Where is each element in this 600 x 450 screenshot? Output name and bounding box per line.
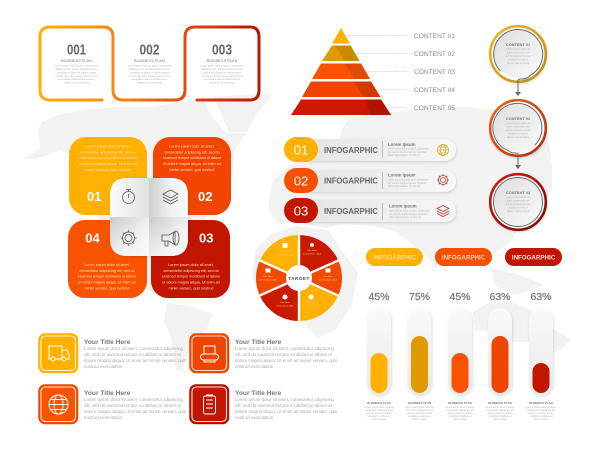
quadrant 02: minim veniam, quis nostrud (170, 168, 214, 172)
bar 45% second: 45% (449, 291, 471, 303)
step 003 text: 003 (212, 42, 232, 58)
bar 63%: dolore magna (493, 418, 508, 421)
circle content 01: Lorem ipsum dolor sit (506, 48, 530, 51)
feature: truck: dolore magna aliqua. Ut enim ad minim veniam, quis (84, 358, 187, 363)
feature: globe: Your Title Here (84, 390, 131, 397)
header pills (366, 248, 562, 266)
pill row 01: Lorem Ipsum (388, 142, 416, 147)
bar 63% second: incididunt ut labore et (529, 415, 553, 418)
bar 63% second: BUSINESS PLAN (529, 401, 553, 405)
bar 75% (405, 291, 435, 421)
feature: printer: nostrud exercitation. (235, 364, 275, 369)
circle content 01: dolore magna aliqua (507, 62, 530, 65)
circle content 02: sed do eiusmod tempor (505, 129, 531, 132)
step 003 text: ut enim ad minim veniam, quis nostrud (201, 75, 244, 78)
feature: clipboard: dolore magna aliqua. Ut enim ad minim veniam, quis (235, 409, 338, 414)
pyramid labels: CONTENT 03 (414, 69, 455, 76)
step 003 text: incididunt ut labore et dolore magna (203, 71, 242, 74)
pill row 03: dolor magna aliqua. Ut enim ad (389, 216, 422, 219)
step 002 text: incididunt ut labore et dolore magna (130, 71, 170, 74)
step 003 text (200, 42, 244, 85)
icon: gear (120, 230, 136, 246)
feature: printer: elit, sed do eiusmod tempor incididunt ut labore et (235, 352, 333, 357)
quadrant 01: minim veniam, quis nostrud (86, 168, 130, 172)
icon: clipboard (204, 395, 216, 414)
pill row 01: elit, sed do eiusmod tempor incididunt (388, 151, 427, 154)
header pills: INFOGARPHIC (373, 254, 417, 262)
step 003 text: Lorem ipsum dolor sit amet, consectetur (200, 64, 244, 68)
pyramid labels: CONTENT 04 (414, 87, 455, 94)
step 002 text: 002 (140, 42, 160, 58)
step 003 text: BUSINESS PLAN (207, 58, 238, 63)
feature: clipboard: nostrud exercitation. (235, 415, 275, 420)
quadrant 03: Lorem ipsum dolor sit amet, (168, 263, 214, 267)
bar 45% second: incididunt ut labore et (448, 415, 472, 418)
bar 63% second: Lorem ipsum dolor sit amet (526, 406, 556, 409)
circle content 03 (489, 173, 547, 231)
bar 75%: dolore magna (412, 418, 428, 421)
pill row 03: elit, sed do eiusmod tempor incididunt (389, 213, 428, 216)
icon: gear (437, 174, 449, 186)
step 002 text: Lorem ipsum dolor sit amet, consectetur (128, 64, 171, 68)
pyramid chart (291, 28, 455, 115)
icon: layers (163, 190, 178, 204)
bar 75%: consectetur adipiscing elit (406, 409, 434, 412)
feature: clipboard: Your Title Here (235, 390, 282, 397)
step 001 text: incididunt ut labore et dolore magna (57, 71, 97, 74)
circle content 02 (489, 99, 547, 169)
header pills: INFOGARPHIC (442, 254, 486, 262)
quadrant 01: eiusmod tempor incididunt ut labore (79, 156, 137, 160)
target pie chart: Lorem ipsum dolor (302, 304, 320, 308)
bar 45% second: BUSINESS PLAN (448, 401, 472, 405)
bar 45%: 45% (368, 291, 390, 303)
feature: truck (39, 334, 187, 372)
bar 45%: Lorem ipsum dolor sit amet (364, 406, 394, 409)
quadrant 01 (69, 137, 147, 215)
quadrant 04: 04 (85, 231, 101, 246)
circle content 03: dolore magna aliqua (507, 210, 530, 213)
circle content 01: incididunt ut labore (508, 58, 529, 62)
bar 63%: 63% (489, 291, 511, 303)
numbered pills (284, 137, 456, 223)
circle content 03: amet consectetur elit (507, 200, 530, 202)
circle content 01: amet consectetur elit (507, 52, 530, 54)
quadrant 03 (151, 220, 230, 298)
pill row 03 (284, 198, 456, 223)
bar 45%: incididunt ut labore et (367, 415, 391, 418)
pyramid labels (414, 33, 455, 112)
pill row 03: Lorem Ipsum (389, 204, 417, 208)
quadrant 03: minim veniam, quis nostrud (169, 286, 213, 290)
bar 45% second: Lorem ipsum dolor sit amet (445, 406, 475, 409)
bar 63% second: sed do eiusmod tempor (528, 412, 554, 415)
bar 45% second: sed do eiusmod tempor (447, 412, 473, 415)
pill row 01: dolor magna aliqua. Ut enim ad (388, 154, 421, 157)
center grey tile (110, 178, 188, 256)
icon: megaphone (162, 231, 179, 246)
pill row 03: INFOGARPHIC (324, 207, 378, 216)
bar 63% second (526, 291, 556, 421)
icon: layers (437, 206, 449, 216)
pill row 02: Lorem Ipsum (388, 172, 416, 178)
pill row 01 (284, 137, 456, 162)
feature: printer (190, 334, 338, 372)
step 001 text: exercitation ullamco laboris nisi ut (58, 78, 95, 81)
bar 63%: sed do eiusmod tempor (487, 412, 513, 415)
icon: truck (49, 346, 69, 361)
feature: truck: elit, sed do eiusmod tempor incididunt ut labore et (84, 352, 182, 357)
pill row 01: Lorem ipsum dolor sit amet, consectetur (388, 148, 429, 150)
quadrant 01: 01 (87, 189, 101, 204)
pyramid labels: CONTENT 01 (414, 33, 455, 40)
feature: globe: dolore magna aliqua. Ut enim ad minim veniam, quis (84, 409, 187, 414)
pyramid labels: CONTENT 05 (414, 105, 455, 112)
bar 63% second: consectetur adipiscing elit (527, 409, 555, 412)
feature: printer: Your Title Here (235, 339, 282, 346)
target pie chart: Title Here (280, 250, 290, 253)
pill row 02: dolor magna aliqua. Ut enim ad (388, 185, 421, 188)
circle content 02: dolore magna aliqua (507, 136, 530, 139)
target pie chart: TARGET (288, 276, 310, 281)
feature: truck: Your Title Here (84, 339, 131, 346)
step 002 text: adipiscing elit, sed do eiusmod tempor (129, 68, 170, 71)
feature: clipboard (190, 385, 338, 424)
icon: globe (49, 395, 68, 414)
quadrant 03: et dolore magna aliqua. Ut enim ad (162, 280, 220, 284)
circle content 03: Lorem ipsum dolor sit (506, 196, 530, 199)
quadrant 04: Lorem ipsum dolor sit amet, (84, 263, 130, 267)
circle content 03: sed do eiusmod tempor (505, 203, 531, 206)
bar 45%: BUSINESS PLAN (367, 401, 391, 405)
bar 63%: consectetur adipiscing elit (486, 409, 514, 412)
bar 63%: incididunt ut labore et (488, 415, 512, 418)
bar 45% (364, 291, 394, 421)
map cut-outs between capsules (474, 331, 529, 362)
pill row 03: Lorem ipsum dolor sit amet, consectetur (389, 210, 430, 212)
quadrant panel (68, 137, 231, 298)
step 001 text: ut enim ad minim veniam, quis nostrud (56, 75, 98, 78)
bar 45%: sed do eiusmod tempor (366, 412, 392, 415)
feature: printer: Lorem ipsum dolor sit amet, consectetur adipiscing (235, 346, 334, 351)
target pie chart: Title Here (306, 301, 316, 304)
bar 63% second: 63% (530, 291, 552, 303)
feature: truck: nostrud exercitation. (84, 364, 124, 369)
bar 45% second: consectetur adipiscing elit (446, 409, 474, 412)
target pie chart: Title Here (307, 249, 317, 252)
feature: globe: elit, sed do eiusmod tempor incididunt ut labore et (84, 403, 182, 408)
capsule bar chart (364, 291, 556, 421)
quadrant 04: consectetur adipiscing elit, sed do (79, 269, 135, 273)
icon: globe (438, 144, 448, 156)
pill row 02: INFOGARPHIC (324, 176, 378, 186)
header pills: INFOGARPHIC (512, 254, 556, 262)
quadrant 01: et dolore magna aliqua. Ut enim ad (79, 162, 137, 166)
circle content 01 (489, 25, 547, 96)
bar 75%: Lorem ipsum dolor sit amet (405, 406, 435, 409)
pill row 02 (284, 168, 456, 193)
step 001 text: aliquip ex ea commodo (64, 82, 90, 85)
bar 63%: Lorem ipsum dolor sit amet (485, 406, 515, 409)
quadrant 02: 02 (198, 189, 212, 204)
bar 75%: incididunt ut labore et (408, 415, 431, 418)
circle content 01: CONTENT 01 (506, 42, 531, 47)
target pie chart: Title Here (323, 275, 333, 278)
target pie chart: Lorem ipsum dolor (259, 278, 277, 282)
step 002 text: BUSINESS PLAN (134, 58, 165, 63)
pie icons and captions (266, 243, 330, 300)
quadrant 03: eiusmod tempor incididunt ut labore (162, 275, 220, 279)
pill row 03: 03 (294, 204, 308, 218)
step 002 text (128, 42, 171, 85)
step 001 text: 001 (67, 42, 86, 58)
icon: printer (200, 346, 218, 362)
target pie chart: Lorem ipsum dolor (276, 304, 294, 308)
bar 45% second (445, 291, 475, 421)
feature: globe: Lorem ipsum dolor sit amet, consectetur adipiscing (84, 397, 183, 402)
step 003 text: exercitation ullamco laboris nisi ut (204, 78, 241, 81)
step 002 text: aliquip ex ea commodo (137, 82, 163, 85)
feature: clipboard: elit, sed do eiusmod tempor incididunt ut labore et (235, 403, 333, 408)
circle content 03: CONTENT 03 (506, 190, 531, 195)
step 001 text: adipiscing elit, sed do eiusmod tempor (56, 68, 97, 71)
pill row 02: 02 (294, 174, 308, 188)
circle content 02: incididunt ut labore (508, 132, 529, 136)
feature: printer: dolore magna aliqua. Ut enim ad minim veniam, quis (235, 358, 338, 363)
quadrant 02: eiusmod tempor incididunt ut labore (163, 156, 221, 160)
circle content 01: sed do eiusmod tempor (505, 55, 531, 58)
circle content 02: Lorem ipsum dolor sit (506, 122, 530, 125)
quadrant 04: eiusmod tempor incididunt ut labore (78, 275, 136, 279)
circle content 03: incididunt ut labore (508, 206, 529, 210)
bar 75%: BUSINESS PLAN (408, 401, 431, 405)
pill row 01: 01 (294, 142, 308, 158)
step 002 text: ut enim ad minim veniam, quis nostrud (129, 75, 171, 78)
pill row 01: INFOGARPHIC (324, 146, 378, 155)
icon: stopwatch (122, 189, 134, 204)
target pie chart: Lorem ipsum dolor (303, 252, 321, 256)
target pie chart (256, 233, 342, 323)
bar 45%: consectetur adipiscing elit (365, 409, 393, 412)
quadrant 03: consectetur adipiscing elit, sed do (163, 269, 219, 273)
feature: clipboard: Lorem ipsum dolor sit amet, consectetur adipiscing (235, 397, 334, 402)
step 003 text: aliquip ex ea commodo (209, 82, 235, 85)
world map background (23, 93, 572, 372)
bar 45% second: dolore magna (453, 418, 468, 421)
quadrant 02: consectetur adipiscing elit, sed do (164, 150, 220, 154)
bar 75%: sed do eiusmod tempor (407, 412, 432, 415)
step 001 text: Lorem ipsum dolor sit amet, consectetur (55, 64, 98, 68)
stepped outline with three steps (40, 27, 259, 100)
feature: globe (39, 385, 187, 424)
bar 63% second: dolore magna (534, 418, 549, 421)
quadrant 04: minim veniam, quis nostrud (85, 286, 129, 290)
pyramid labels: CONTENT 02 (414, 51, 455, 58)
bar 45%: dolore magna (372, 418, 387, 421)
quadrant 02: Lorem ipsum dolor sit amet, (169, 144, 215, 148)
step 003 text: adipiscing elit, sed do eiusmod tempor (201, 68, 243, 71)
step 001 text (55, 42, 98, 85)
quadrant 02: et dolore magna aliqua. Ut enim ad (163, 162, 221, 166)
step 001 text: BUSINESS PLAN (61, 58, 92, 63)
quadrant 04 (68, 220, 147, 298)
circle flow (489, 25, 547, 231)
circle content 02: amet consectetur elit (507, 126, 530, 128)
quadrant 04: et dolore magna aliqua. Ut enim ad (78, 280, 136, 284)
quadrant 02 (153, 137, 231, 215)
step 002 text: exercitation ullamco laboris nisi ut (131, 78, 168, 81)
bar 75%: 75% (409, 291, 430, 303)
target pie chart: Title Here (280, 301, 290, 304)
bar 63% (485, 291, 515, 421)
bar 63%: BUSINESS PLAN (488, 401, 512, 405)
target pie chart: Lorem ipsum dolor (276, 254, 294, 256)
pill row 02: Lorem ipsum dolor sit amet, consectetur (388, 178, 429, 182)
quadrant 01: consectetur adipiscing elit, sed do (80, 150, 136, 154)
feature: globe: nostrud exercitation. (84, 415, 124, 420)
quadrant 03: 03 (199, 231, 213, 246)
circle content 02: CONTENT 02 (506, 116, 531, 121)
feature: truck: Lorem ipsum dolor sit amet, consectetur adipiscing (84, 346, 183, 351)
quadrant 01: Lorem ipsum dolor sit amet, (85, 144, 131, 148)
target pie chart: Lorem ipsum dolor (319, 278, 337, 282)
pill row 02: elit, sed do eiusmod tempor incididunt (388, 182, 427, 185)
target pie chart: Title Here (263, 275, 273, 278)
